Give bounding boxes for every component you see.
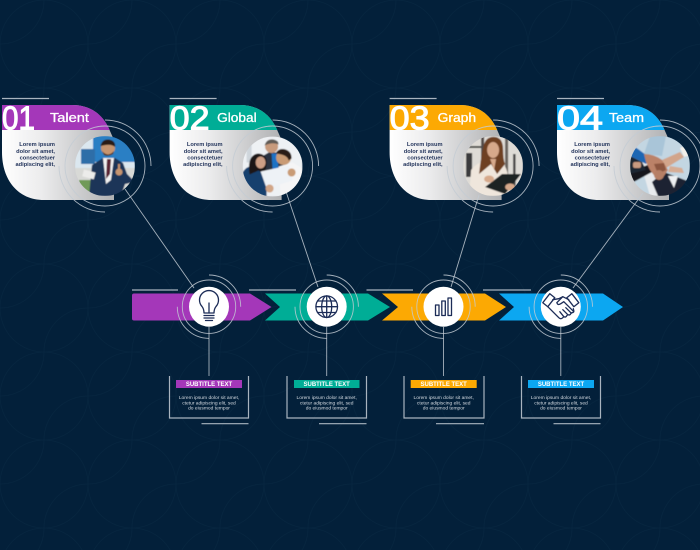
card text: consectetuer — [575, 155, 611, 161]
subtitle box 3: do eiusmod tempor — [423, 406, 465, 412]
subtitle box 2: do eiusmod tempor — [306, 406, 348, 412]
ring decoration — [447, 120, 539, 212]
heading Talent: Talent — [50, 110, 89, 125]
ring decoration — [614, 120, 700, 212]
subtitle box 1: SUBTITLE TEXT — [186, 382, 232, 388]
subtitle box 2 — [287, 376, 366, 424]
subtitle box 1: Lorem ipsum dolor sit amet, — [179, 395, 239, 401]
panel: card 02 Global — [168, 98, 319, 212]
panel: card 01 Talent — [0, 98, 151, 212]
timeline arrow: purple — [132, 294, 272, 320]
icon node: handshake — [529, 275, 592, 338]
card text: adipiscing elit, — [570, 162, 610, 168]
subtitle box 2: Lorem ipsum dolor sit amet, — [297, 395, 357, 401]
timeline arrow: amber — [382, 294, 506, 320]
heading Graph: Graph — [438, 110, 476, 125]
icon node: bar graph — [412, 275, 475, 338]
subtitle box 4: do eiusmod tempor — [540, 406, 582, 412]
subtitle box 1 — [170, 376, 248, 424]
subtitle box 4: SUBTITLE TEXT — [538, 382, 584, 388]
card text: Lorem ipsum — [187, 142, 223, 148]
subtitle box 1: do eiusmod tempor — [188, 406, 230, 412]
card text: Lorem ipsum — [19, 142, 55, 148]
card text: consectetuer — [407, 155, 443, 161]
card text: adipiscing elit, — [15, 162, 55, 168]
ring decoration — [59, 120, 151, 212]
icon node: globe — [295, 275, 358, 338]
timeline arrow: blue — [499, 294, 623, 320]
subtitle box 1: ctetur adipiscing elit, sed — [182, 400, 236, 406]
icon node: light bulb — [177, 275, 241, 338]
connector lines from photos to timeline — [125, 189, 643, 376]
card text: dolor sit amet, — [404, 149, 443, 155]
photo: three colleagues — [243, 136, 303, 196]
card text: consectetuer — [20, 155, 56, 161]
subtitle box 4 — [522, 376, 600, 424]
card text: adipiscing elit, — [403, 162, 443, 168]
subtitle box 3: ctetur adipiscing elit, sed — [417, 400, 471, 406]
bars above timeline arrows — [132, 289, 531, 291]
number 01: 01 — [2, 100, 35, 138]
number 02: 02 — [170, 100, 210, 138]
card text: adipiscing elit, — [183, 162, 223, 168]
ring decoration — [227, 120, 319, 212]
card text: consectetuer — [187, 155, 223, 161]
subtitle box 4: Lorem ipsum dolor sit amet, — [531, 395, 591, 401]
panel: card 04 Team — [555, 98, 700, 212]
heading Global: Global — [217, 110, 257, 125]
subtitle box 2: ctetur adipiscing elit, sed — [300, 400, 354, 406]
timeline arrow: teal — [265, 294, 390, 320]
photo: team stacking hands — [630, 136, 690, 196]
subtitle box 2: SUBTITLE TEXT — [304, 382, 350, 388]
card text: dolor sit amet, — [16, 149, 55, 155]
subtitle box 4: ctetur adipiscing elit, sed — [534, 400, 588, 406]
heading Team: Team — [609, 110, 644, 125]
photo: woman with clipboard — [463, 136, 523, 196]
subtitle box 3 — [404, 376, 484, 424]
number 04: 04 — [557, 100, 603, 138]
panel: card 03 Graph — [388, 98, 539, 212]
photo: businessman — [75, 136, 135, 196]
card text: Lorem ipsum — [574, 142, 610, 148]
subtitle box 3: Lorem ipsum dolor sit amet, — [414, 395, 474, 401]
number 03: 03 — [390, 100, 430, 138]
card text: Lorem ipsum — [407, 142, 443, 148]
subtitle box 3: SUBTITLE TEXT — [421, 382, 467, 388]
card text: dolor sit amet, — [571, 149, 610, 155]
card text: dolor sit amet, — [184, 149, 223, 155]
